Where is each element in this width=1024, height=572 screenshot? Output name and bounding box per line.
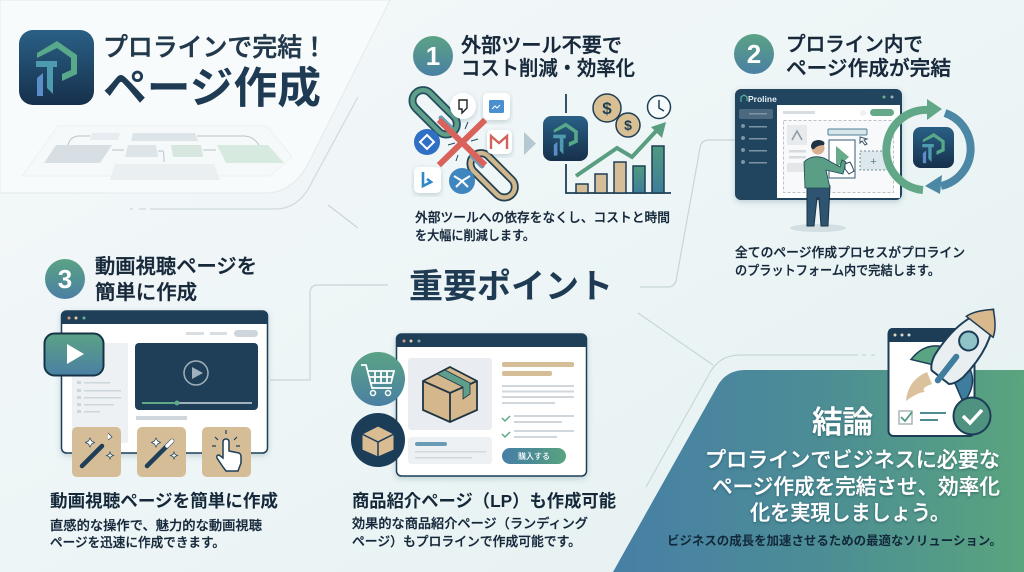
icon: checklist document xyxy=(888,328,975,436)
heading: key points: 重要ポイント xyxy=(409,268,613,306)
heading 2: ページ作成が完結 xyxy=(786,57,951,80)
panel: point 1 xyxy=(408,34,671,243)
number badge 1 xyxy=(413,36,453,76)
chart: cost and growth: $ xyxy=(602,99,612,118)
description 3: 直感的な操作で、魅力的な動画視聴 xyxy=(50,518,262,533)
heading 1: 外部ツール不要で xyxy=(461,34,622,57)
description 3: ページを迅速に作成できます。 xyxy=(50,535,225,550)
subheading 3: 動画視聴ページを簡単に作成 xyxy=(50,491,278,511)
subheading 4: 商品紹介ページ（LP）も作成可能 xyxy=(352,491,616,511)
heading 1 xyxy=(461,34,635,80)
description 1: 外部ツールへの依存をなくし、コストと時間 xyxy=(415,210,670,225)
panel: conclusion xyxy=(613,289,1024,572)
title line 1: プロラインで完結！ xyxy=(103,34,327,62)
description 2 xyxy=(735,245,965,278)
chart: cost and growth: $ xyxy=(624,117,632,133)
chart: cost and growth xyxy=(566,94,671,193)
heading 3: 動画視聴ページを xyxy=(95,255,257,278)
title line 2: ページ作成 xyxy=(103,65,321,113)
icon: magic wand 1 xyxy=(72,427,121,477)
description 2: 全てのページ作成プロセスがプロライン xyxy=(735,245,965,260)
conclusion heading: 結論 xyxy=(812,405,873,440)
panel: point 2 xyxy=(734,33,971,278)
heading 3 xyxy=(95,255,257,304)
description 3 xyxy=(50,518,262,550)
icon: person at screen xyxy=(790,140,854,232)
connector lines xyxy=(270,140,875,487)
number badge 1: 1 xyxy=(426,41,440,71)
heading 1: コスト削減・効率化 xyxy=(461,57,635,80)
icon: cycle arrows with logo xyxy=(886,99,971,194)
app window: + xyxy=(870,156,877,168)
product page window: 購入する xyxy=(518,451,550,461)
panel: header xyxy=(0,0,390,209)
description 1 xyxy=(415,210,670,243)
number badge 2 xyxy=(734,34,774,74)
number badge 3: 3 xyxy=(58,264,72,294)
conclusion message xyxy=(705,449,1000,525)
heading 3: 簡単に作成 xyxy=(95,281,197,304)
app window xyxy=(735,89,902,200)
description 2: のプラットフォーム内で完結します。 xyxy=(735,263,940,278)
product page window xyxy=(396,334,587,476)
conclusion message: 化を実現しましょう。 xyxy=(750,502,950,525)
number badge 3 xyxy=(45,259,85,299)
panel: landing page xyxy=(351,334,616,549)
video page window xyxy=(61,311,268,453)
heading 2 xyxy=(786,33,951,80)
description 4 xyxy=(352,516,588,549)
description 4: 効果的な商品紹介ページ（ランディング xyxy=(352,516,588,531)
icon: check badge xyxy=(954,398,990,434)
icon: Proline logo xyxy=(19,30,94,105)
icon: shopping cart xyxy=(351,352,405,406)
conclusion note: ビジネスの成長を加速させるための最適なソリューション。 xyxy=(667,533,1002,548)
heading 2: プロライン内で xyxy=(786,33,923,56)
panel: point 3 xyxy=(44,255,278,550)
arrow xyxy=(524,132,536,155)
icon: magic wand 2 xyxy=(137,427,186,477)
icon: Proline logo xyxy=(543,116,588,161)
icon: tapping hand xyxy=(202,427,251,477)
icon: broken chain with tools xyxy=(408,86,519,202)
conclusion message: ページ作成を完結させ、効率化 xyxy=(712,476,1000,499)
number badge 2: 2 xyxy=(747,39,761,69)
description 4: ページ）もプロラインで作成可能です。 xyxy=(352,534,581,549)
icon: rocket xyxy=(910,289,1020,403)
icon: play badge xyxy=(44,334,104,376)
flow diagram wireframe xyxy=(22,126,292,180)
app window: Proline xyxy=(748,94,777,104)
description 1: を大幅に削減します。 xyxy=(415,228,535,243)
icon: package xyxy=(351,413,405,467)
conclusion message: プロラインでビジネスに必要な xyxy=(705,449,1000,472)
